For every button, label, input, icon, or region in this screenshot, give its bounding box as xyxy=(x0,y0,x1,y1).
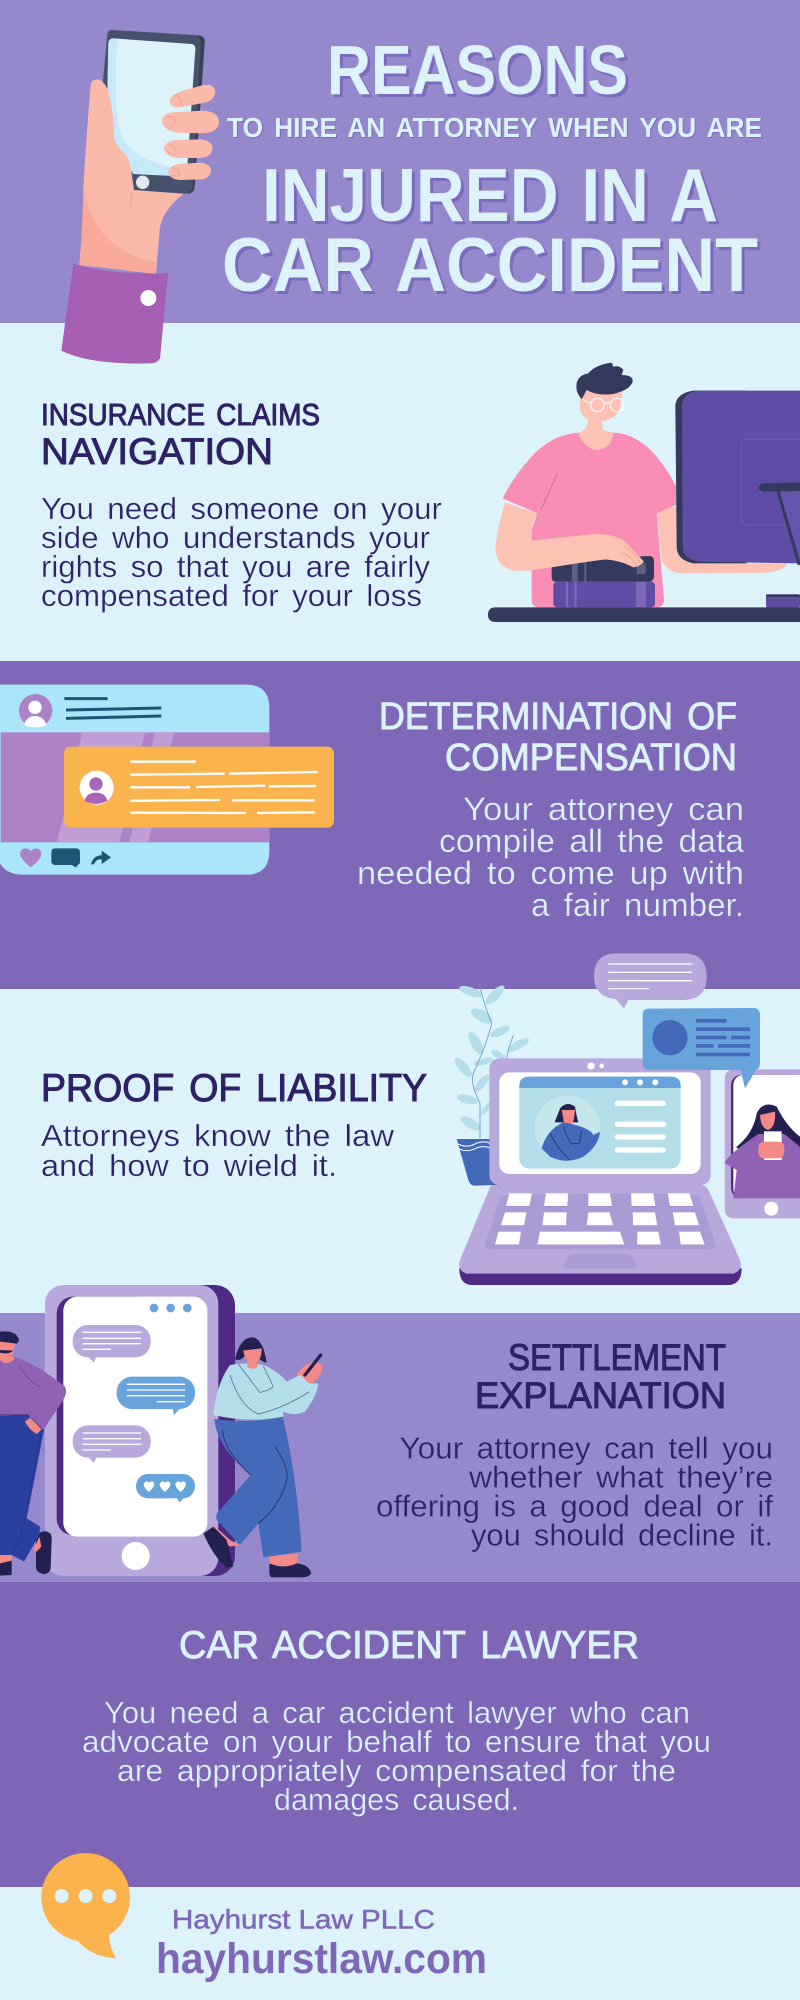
icon: plant xyxy=(452,983,531,1186)
heading: EXPLANATION xyxy=(475,1375,726,1416)
heading xyxy=(41,398,320,472)
icon: hand holding phone xyxy=(61,30,219,364)
man xyxy=(0,1331,66,1576)
text block xyxy=(376,1432,774,1552)
text block: damages caused. xyxy=(274,1783,519,1817)
illustration: two people with giant phone xyxy=(0,1285,323,1577)
text block: compensated for your loss xyxy=(41,579,422,613)
text block xyxy=(82,1696,711,1817)
website: hayhurstlaw.com xyxy=(156,1935,487,1983)
heading xyxy=(379,696,737,779)
heading: DETERMINATION OF xyxy=(379,696,737,738)
text block: you should decline it. xyxy=(471,1518,773,1552)
text block: whether what they’re xyxy=(468,1460,773,1494)
text block xyxy=(357,791,744,923)
text block xyxy=(41,492,442,613)
speech bubble: blue xyxy=(643,1008,760,1088)
text block: advocate on your behalf to ensure that you xyxy=(82,1725,711,1759)
text block: You need a car accident lawyer who can xyxy=(104,1696,690,1730)
title: INJURED IN A xyxy=(262,153,718,237)
woman xyxy=(203,1337,323,1577)
title xyxy=(222,31,762,308)
text block: compile all the data xyxy=(439,823,744,859)
heading: PROOF OF LIABILITY xyxy=(41,1067,427,1110)
text block: a fair number. xyxy=(531,887,744,923)
panel: header xyxy=(61,30,762,364)
text block: Your attorney can xyxy=(463,791,744,827)
icon: phone with woman xyxy=(725,1069,800,1218)
text block: side who understands your xyxy=(41,521,430,555)
text block: are appropriately compensated for the xyxy=(117,1754,676,1788)
text block: offering is a good deal or if xyxy=(376,1490,774,1524)
panel: proof of liability xyxy=(41,953,800,1285)
text block: and how to wield it. xyxy=(41,1149,337,1183)
heading xyxy=(475,1337,726,1416)
text block: Attorneys know the law xyxy=(41,1119,395,1153)
illustration: social media post xyxy=(0,685,334,875)
text block: rights so that you are fairly xyxy=(41,550,431,584)
icon: orange speech bubble xyxy=(41,1853,130,1958)
illustration: laptop, plant, chat bubbles and phone xyxy=(452,953,800,1285)
speech bubble: lavender xyxy=(594,953,707,1008)
heading: INSURANCE CLAIMS xyxy=(41,398,320,432)
title: CAR ACCIDENT xyxy=(222,223,758,308)
panel: car accident lawyer xyxy=(82,1624,711,1817)
text block: You need someone on your xyxy=(41,492,442,526)
text block xyxy=(41,1119,395,1183)
title: REASONS xyxy=(327,31,628,109)
giant phone xyxy=(45,1285,235,1576)
heading: CAR ACCIDENT LAWYER xyxy=(179,1624,639,1667)
text block: needed to come up with xyxy=(357,855,744,891)
heading: SETTLEMENT xyxy=(508,1337,726,1378)
heading: NAVIGATION xyxy=(41,431,273,472)
keyboard keys xyxy=(495,1193,705,1245)
panel: footer xyxy=(41,1853,487,1983)
text block: Your attorney can tell you xyxy=(400,1432,773,1466)
panel: determination of compensation xyxy=(0,685,744,923)
company name: Hayhurst Law PLLC xyxy=(172,1904,435,1934)
title: TO HIRE AN ATTORNEY WHEN YOU ARE xyxy=(227,112,762,143)
panel: insurance claims navigation xyxy=(41,363,800,622)
heading: COMPENSATION xyxy=(445,737,737,779)
panel: settlement explanation xyxy=(0,1285,774,1577)
illustration: man at computer xyxy=(488,363,800,622)
laptop xyxy=(459,1058,742,1285)
